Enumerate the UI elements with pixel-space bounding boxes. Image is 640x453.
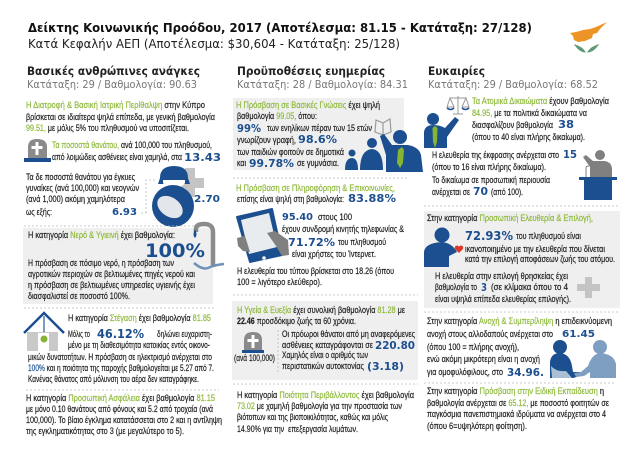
icon: tombstone (242, 332, 264, 353)
text: shelter: μικών δυνατοτήτων. Η πρόσβαση σε ηλεκτρισμό ανέρχεται στο (28, 352, 212, 362)
icon: scales of justice (447, 96, 469, 114)
text: water category: 100% (145, 240, 205, 262)
text: premature deaths: 220.80 (375, 340, 415, 352)
text: maternal and infant mortality: (ανά 1,000) ακόμη χαμηλότερα (26, 194, 125, 204)
heading: basic human needs: Κατάταξη: 29 / Βαθμολογία: 90.63 (27, 79, 197, 91)
text: satisfaction: του πληθυσμού είναι (516, 231, 581, 241)
heading: foundations of wellbeing: Προϋποθέσεις ευημερίας (237, 64, 385, 78)
text: shelter: Κανένας θάνατος από μόλυνση του αέρα δεν καταγράφηκε. (28, 374, 199, 384)
text: personal rights: (όπου το 40 είναι πλήρης δικαίωμα). (472, 132, 585, 142)
text: mobile and internet: στους 100 (318, 212, 352, 222)
text: death rates: 13.43 (184, 152, 221, 164)
text: advanced education (427, 386, 609, 431)
text: shelter (28, 313, 214, 384)
text: freedom of religion: 3 (481, 282, 487, 294)
text: personal safety: της εγκληματικότητας στο 3 (με μεγαλύτερο το 5). (26, 426, 184, 436)
text: personal rights (472, 96, 609, 142)
text: shelter: δηλώνει ευχαριστη- (157, 329, 212, 339)
text: mobile and internet: 71.72% (288, 237, 336, 249)
icon: smartphone in hand (237, 209, 289, 262)
text: basic knowledge (236, 100, 380, 170)
text: tolerance and inclusion: Στην κατηγορία Ανοχή & Συμπερίληψη η επιδεικνύομενη (427, 316, 612, 326)
icon: faucet (194, 224, 224, 268)
title (28, 20, 532, 51)
text: environmental quality: βιότοπων και της βιοποικιλότητας, καθώς και μόλις (237, 412, 388, 422)
text: basic knowledge: Η Πρόσβαση σε Βασικές Γνώσεις έχει ψηλή (236, 100, 380, 110)
text: mobile and internet: 95.40 (282, 212, 313, 223)
text: information and communications: επίσης είναι ψηλή στη βαθμολογία: (237, 194, 344, 204)
icon: plus (577, 277, 600, 298)
text: freedom of expression: ανέρχεται σε (432, 187, 470, 197)
heading: foundations of wellbeing: Κατάταξη: 28 / Βαθμολογία: 84.31 (237, 79, 408, 91)
panel: foundations of wellbeing (232, 64, 423, 434)
dashed divider (424, 382, 615, 384)
text: tolerance and inclusion: για ομοφυλόφιλους, στο (427, 367, 503, 377)
text: basic knowledge: σε γυμνάσια. (297, 158, 339, 168)
text: water category: Η κατηγορία Νερό & Υγιεινή έχει βαθμολογία: (28, 230, 175, 240)
text: premature deaths: περιστατικών αυτοκτονίας (282, 361, 365, 371)
text: mobile and internet: έχουν συνδρομή κινητής τηλεφωνίας & (282, 224, 404, 234)
text: satisfaction (465, 229, 615, 264)
text: freedom of expression: (από 100). (491, 187, 523, 197)
text: freedom of expression (432, 149, 577, 198)
text: advanced education: Στην κατηγορία Πρόσβαση στην Ειδική Εκπαίδευση η (427, 386, 604, 396)
text: personal freedom heading: Στην κατηγορία Προσωπική Ελευθερία & Επιλογή, (427, 213, 593, 223)
icon: book (375, 119, 391, 135)
text: freedom of religion: (σε κλίμακα όπου το 4 (491, 282, 568, 292)
panel: basic knowledge (233, 98, 404, 170)
text: nutrition: Η Διατροφή & Βασική Ιατρική Περίθαλψη στην Κύπρο (26, 100, 205, 110)
text: basic knowledge: των παιδιών φοιτούν σε δημοτικά (237, 147, 344, 157)
text: personal rights: 38 (558, 119, 574, 131)
text: basic knowledge: βαθμολογία 99.05, όπου: (237, 111, 317, 121)
panel: opportunity (424, 64, 620, 431)
text: premature deaths: Χαμηλός είναι ο αριθμός των (282, 350, 368, 360)
text: maternal and infant mortality: Τα δε ποσοστά θανάτου για έγκυες (26, 172, 136, 182)
dashed divider (24, 225, 205, 227)
text: maternal and infant mortality: 2.70 (194, 194, 220, 205)
text: death rates (52, 140, 221, 164)
text: tolerance and inclusion: ανοχή στους αλλοδαπούς ανέρχεται στο (427, 329, 553, 339)
text: tolerance and inclusion: 61.45 (562, 329, 595, 340)
text: personal rights: 84.95, με τα πολιτικά δικαιώματα να (472, 108, 587, 118)
text: tolerance and inclusion: 34.96. (507, 366, 544, 379)
dashed divider (26, 389, 219, 391)
text: freedom of expression: 70 (473, 186, 488, 198)
text: environmental quality: 14.90% για την επεξεργασία λυμάτων. (237, 424, 358, 434)
panel: basic human needs (23, 64, 224, 436)
dashed divider (424, 311, 620, 313)
panel: personal freedom and choice (424, 211, 620, 308)
text: freedom of expression: (όπου το 16 είναι πλήρης δικαίωμα). (432, 162, 546, 172)
text: personal safety: Η κατηγορία Προσωπική Ασφάλεια έχει βαθμολογία 81.15 (26, 393, 215, 403)
text: freedom of expression: Η ελευθερία της έκφρασης ανέρχεται στο (432, 150, 559, 160)
text: basic knowledge: γνωρίζουν γραφή, (237, 135, 296, 145)
text: water category: αγροτικών περιοχών σε βελτιωμένες πηγές νερού και (28, 269, 195, 279)
panel: water and sanitation (23, 224, 224, 304)
text: mobile and internet (282, 212, 404, 259)
text: information and communications: 83.88% (348, 193, 397, 205)
text: advanced education: βαθμολογία ανέρχεται σε 65.12, με ποσοστό φοιτητών σε (427, 398, 609, 408)
text: maternal and infant mortality: γυναίκες (ανά 100,000) και νεογνών (26, 183, 139, 193)
text: tolerance and inclusion: (όπου 100 = πλήρης ανοχή), (427, 342, 519, 352)
panel: health and wellness (232, 301, 418, 380)
dashed divider (24, 307, 214, 309)
icon: mother and baby (141, 166, 204, 227)
title: Κατά Κεφαλήν ΑΕΠ (Αποτέλεσμα: $30,604 - Κατάταξη: 25/128) (28, 36, 400, 51)
text: death rates: από λοιμώδεις ασθένειες είναι χαμηλά, στα (52, 152, 182, 162)
text: health intro (237, 305, 405, 326)
text: basic knowledge: και (237, 158, 246, 168)
text: personal safety (26, 393, 222, 436)
icon: two people shaking hands (550, 340, 616, 378)
text: basic knowledge: 99% (237, 123, 261, 135)
text: environmental quality (237, 390, 414, 434)
text: health intro: 22.46 προσδόκιμο ζωής τα 60 χρόνια. (237, 316, 356, 326)
text: tolerance and inclusion: ενώ ακόμη μικρότερη είναι η ανοχή (427, 354, 540, 364)
text: premature deaths (282, 329, 416, 373)
text: environmental quality: 73.02 με χαμηλή βαθμολογία για την προστασία των (237, 401, 402, 411)
dashed divider (424, 205, 620, 207)
heading: opportunity (428, 64, 598, 91)
heading: basic human needs: Βασικές ανθρώπινες ανάγκες (27, 64, 200, 78)
icon: person with heart (424, 228, 463, 267)
text: freedom of religion: Η ελευθερία στην επιλογή θρησκείας έχει (435, 271, 568, 281)
text: freedom of religion: είναι υψηλά επίπεδα ελευθερίας επιλογής). (435, 294, 571, 304)
text: environmental quality: Η κατηγορία Ποιότητα Περιβάλλοντος έχει βαθμολογία (237, 390, 414, 400)
text: shelter: Η κατηγορία Στέγαση έχει βαθμολογία 81.85 (68, 313, 211, 323)
text: water category: η πρόσβαση σε βελτιωμένες υπηρεσίες υγιεινής έχει (28, 280, 195, 290)
text: advanced education: (όπου 6=υψηλότερη φοίτηση). (427, 421, 527, 431)
dashed divider (233, 177, 408, 179)
text: freedom of religion (435, 271, 571, 304)
heading: basic human needs (27, 64, 200, 91)
text: personal safety: 100,000). Το βίαιο έγκλημα κατατάσσεται στο 2 και η αντίληψη (26, 415, 222, 425)
text: premature deaths: Οι πρόωροι θάνατοι από μη αναφερόμενες (282, 329, 416, 339)
icon: teacher and children (345, 130, 423, 172)
text: per 100,000: (ανά 100,000) (234, 353, 275, 363)
text: mobile and internet: του πληθυσμού (338, 237, 386, 247)
text: personal rights: Τα Ατομικά Δικαιώματα έχουν βαθμολογία (472, 96, 609, 106)
title: Δείκτης Κοινωνικής Προόδου, 2017 (Αποτέλεσμα: 81.15 - Κατάταξη: 27/128) (28, 20, 532, 35)
text: maternal and infant mortality: 6.93 (112, 207, 137, 218)
text: nutrition: 99.51, με μόλις 5% του πληθυσμού να υποσιτίζεται. (26, 123, 189, 133)
text: water category (28, 230, 205, 301)
text: shelter: Μόλις το (68, 329, 90, 339)
text: shelter: 100% και η ποιότητα της παροχής βαθμολογείται με 5.27 από 7. (28, 363, 214, 373)
text: mobile and internet: είναι χρήστες του Ίντερνετ. (292, 249, 376, 259)
heading: opportunity: Κατάταξη: 29 / Βαθμολογία: 68.52 (428, 79, 598, 91)
text: maternal and infant mortality (26, 172, 220, 218)
icon: person raising scales (424, 113, 459, 148)
text: basic knowledge: 98.6% (298, 134, 338, 146)
icon: tombstone (24, 139, 51, 162)
text: personal safety: με μόνο 0.10 θανάτους από φόνους και 5.2 από τροχαία (ανά (26, 404, 213, 414)
text: press freedom (237, 266, 394, 287)
text: basic knowledge: 99.78% (249, 158, 294, 170)
icon: speaker at podium (579, 150, 617, 200)
text: health intro: Η Υγεία & Ευεξία έχει συνολική βαθμολογία 81.28 με (237, 305, 405, 315)
text: press freedom: Η ελευθερία του τύπου βρίσκεται στο 18.26 (όπου (237, 266, 394, 276)
text: press freedom: 100 = λιγότερο ελεύθερο). (237, 277, 322, 287)
text: satisfaction: 72.93% (465, 229, 513, 243)
text: death rates: Τα ποσοστά θανάτου, ανά 100,000 του πληθυσμού, (52, 140, 212, 150)
text: information and communications: Η Πρόσβαση σε Πληροφόρηση & Επικοινωνίες, (236, 183, 395, 193)
text: basic knowledge: των ενηλίκων πέραν των 15 ετών (267, 123, 372, 133)
text: premature deaths: ασθένειες καταγράφονται σε (282, 340, 373, 350)
text: tolerance and inclusion (427, 316, 612, 379)
text: shelter: 46.12% (97, 327, 144, 341)
text: nutrition: βρίσκεται σε ιδιαίτερα ψηλά επίπεδα, με γενική βαθμολογία (26, 112, 215, 122)
heading: foundations of wellbeing (237, 64, 408, 91)
text: freedom of religion: βαθμολογία το (435, 282, 477, 292)
text: maternal and infant mortality: ως εξής: (26, 207, 52, 217)
icon: house (24, 313, 64, 351)
dashed divider (233, 383, 418, 385)
heading: opportunity: Ευκαιρίες (428, 64, 485, 78)
text: freedom of expression: 15 (563, 149, 577, 161)
text: water category: Η πρόσβαση σε πόσιμο νερό, η πρόσβαση των (28, 258, 174, 268)
text: information and communications (236, 183, 397, 205)
text: personal rights: διασφαλίζουν βαθμολογία (472, 120, 553, 130)
text: premature deaths: (3.18) (367, 361, 404, 373)
dashed divider (233, 294, 418, 296)
text: shelter: μένο με τη διαθεσιμότητα κατοικίας εντός οικονο- (68, 340, 210, 350)
text: nutrition (26, 100, 215, 133)
icon: flag of Cyprus (570, 22, 607, 52)
text: satisfaction: ικανοποιημένο με την ελευθερία που δίνεται (465, 244, 605, 254)
text: freedom of expression: Το δικαίωμα σε προσωπική περιουσία (432, 175, 550, 185)
text: water category: διασφαλιστεί σε ποσοστό 100%. (28, 291, 130, 301)
